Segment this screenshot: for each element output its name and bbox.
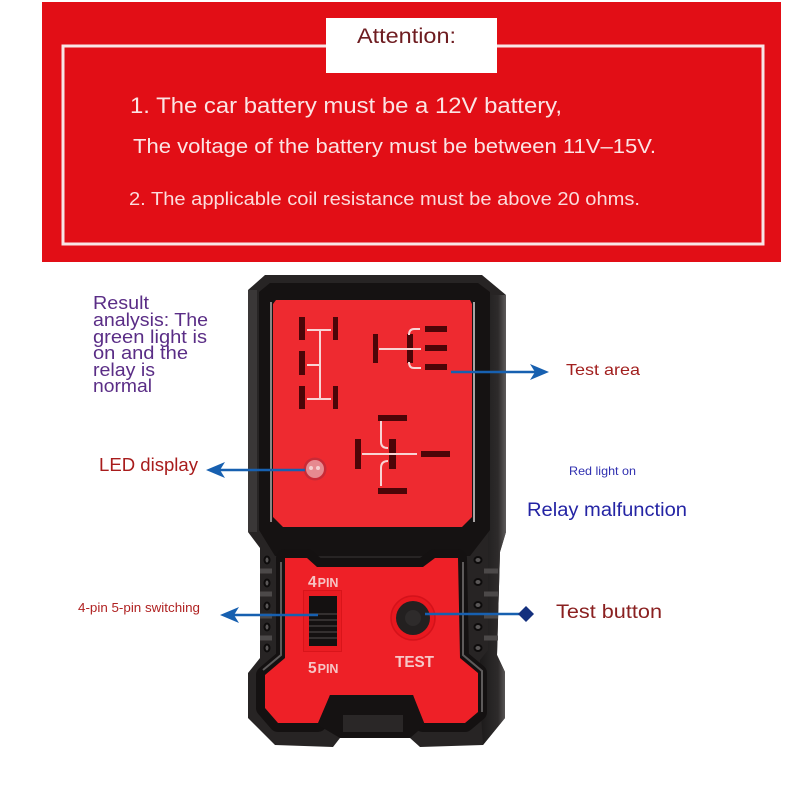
text: voltage range: The voltage of the battery must be between 11V–15V. (133, 136, 656, 158)
4PIN label: 4PIN (308, 574, 338, 591)
LED indicator (304, 458, 326, 480)
text: result analysis: normal (93, 376, 152, 396)
arrow: test button (425, 606, 534, 622)
text: result analysis (93, 293, 208, 396)
lower frame (265, 558, 478, 723)
left side shading (248, 290, 257, 532)
attention heading (326, 18, 497, 73)
label: LED display: LED display (99, 455, 198, 475)
5PIN label: 5PIN (308, 660, 338, 677)
label: pin switching: 4-pin 5-pin switching (78, 601, 200, 615)
text: result analysis: on and the (93, 343, 188, 363)
arrow: pin switching (220, 607, 318, 623)
control panel (265, 558, 478, 738)
upper frame (259, 283, 490, 556)
attention heading: Attention: (357, 25, 456, 48)
text: result analysis: relay is (93, 360, 155, 380)
label: test area: Test area (566, 362, 640, 379)
panel: attention banner (42, 2, 781, 262)
arrow: LED display (206, 462, 305, 478)
text: result analysis: analysis: The (93, 310, 208, 330)
TEST label: TEST (395, 654, 434, 671)
text: coil resistance: 2. The applicable coil resistance must be above 20 ohms. (129, 188, 640, 209)
text: battery requirement: 1. The car battery must be a 12V battery, (130, 93, 562, 118)
grip bolts (264, 556, 482, 652)
device body (248, 275, 506, 747)
device: relay tester (248, 275, 506, 747)
text: result analysis: green light is (93, 327, 207, 347)
test button (391, 596, 435, 640)
circuit traces (307, 329, 421, 486)
grip ribs (260, 571, 498, 638)
label: relay malfunction: Relay malfunction (527, 500, 687, 521)
4-pin diagrams (299, 317, 450, 494)
label: red light on: Red light on (569, 464, 636, 478)
slide switch (304, 590, 342, 652)
dark handle recess (318, 695, 425, 738)
text: result analysis: Result (93, 293, 149, 313)
label: test button: Test button (556, 602, 662, 623)
arrow: test area (451, 364, 549, 380)
right grip shading (480, 295, 506, 745)
test area panel (273, 300, 472, 527)
